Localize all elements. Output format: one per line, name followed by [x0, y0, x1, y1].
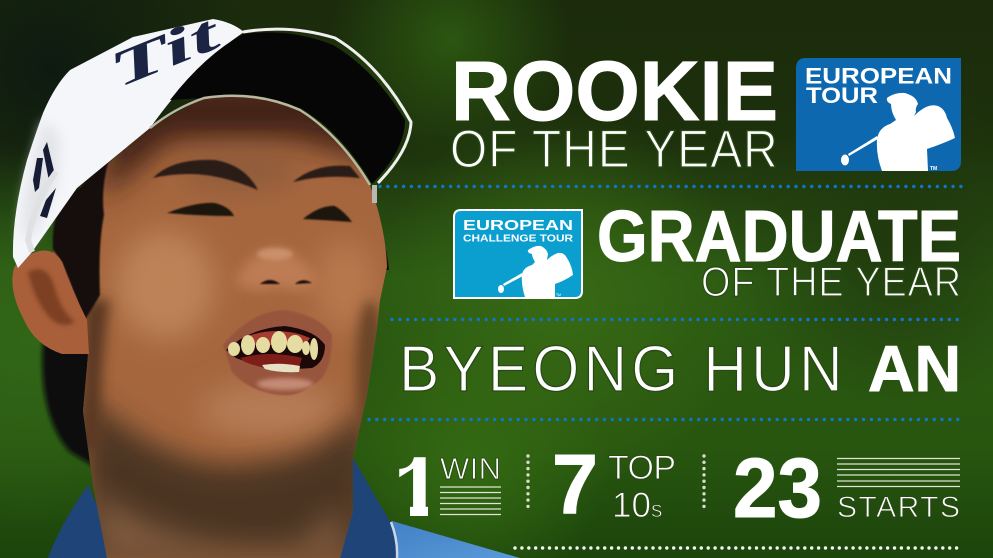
lower teeth: [262, 364, 300, 372]
logo: european challenge tour: [454, 210, 582, 298]
jaw and neck shadow: [85, 395, 370, 558]
stat: 7 top 10s: TOP: [608, 449, 676, 487]
forehead shade: [103, 97, 362, 206]
logo: european tour: TOUR: [806, 83, 878, 108]
cap crown: [13, 19, 244, 268]
dotted separator: [702, 456, 706, 512]
portrait: golfer with white cap: [12, 3, 520, 558]
player name: BYEONG HUN: [399, 333, 843, 405]
stat: 1 win: 1: [394, 440, 441, 534]
eyebrows: [153, 160, 258, 190]
heading: graduate of the year: [597, 197, 961, 305]
stat: 7 top 10s: 7: [552, 437, 598, 531]
icon: golfer silhouette: [498, 246, 573, 297]
shirt body: [380, 521, 520, 558]
upper teeth: [228, 331, 318, 360]
inner sweatband: [150, 96, 370, 185]
heading: graduate of the year: GRADUATE: [597, 197, 961, 277]
shirt collar: [48, 458, 398, 558]
heading: rookie of the year: OF THE YEAR: [450, 119, 778, 179]
dotted separator: [526, 456, 530, 512]
logo: european tour: EUROPEAN: [805, 64, 952, 88]
stat: 1 win: WIN: [440, 451, 501, 486]
icon: golfer silhouette: [841, 93, 955, 171]
hair at the back of the head: [42, 340, 100, 470]
cap logo script: Tit: [101, 3, 230, 98]
cheek highlights: [115, 230, 215, 340]
logo: european challenge tour: TM: [556, 293, 561, 297]
heading: rookie of the year: ROOKIE: [451, 44, 778, 138]
logo: european tour: TM: [930, 166, 937, 172]
stat: 23 starts: [733, 441, 960, 535]
stat: 7 top 10s: [552, 437, 676, 531]
cap strap: [28, 172, 56, 252]
brim top outline: [243, 29, 411, 183]
blue dotted divider 2: [392, 318, 961, 321]
left eye: [167, 203, 234, 216]
heading: graduate of the year: OF THE YEAR: [701, 259, 961, 305]
lips: [223, 310, 332, 395]
blue dotted divider 1: [380, 185, 961, 188]
cap mesh shading: [22, 120, 60, 235]
buckle: [372, 185, 377, 203]
stat: 7 top 10s: 10s: [612, 486, 662, 525]
nose: [236, 248, 318, 290]
stat: 1 win: [399, 457, 501, 516]
mouth: [223, 310, 332, 395]
ear: [12, 250, 89, 354]
right hair: [355, 180, 389, 270]
heading: rookie of the year: [450, 44, 778, 179]
cap underside brim: [170, 32, 405, 184]
logo: european challenge tour: CHALLENGE TOUR: [463, 232, 573, 244]
stat: 23 starts: 23: [733, 441, 822, 535]
logo: european tour: [796, 58, 961, 172]
blue dotted divider 3: [369, 418, 961, 421]
collar stripe: [391, 522, 397, 558]
hairline left: [53, 150, 112, 320]
right eye: [303, 206, 352, 222]
logo: european challenge tour: EUROPEAN: [463, 217, 573, 234]
player name: AN: [868, 332, 961, 405]
face and neck: [53, 97, 387, 558]
white dotted divider: [515, 546, 961, 550]
stat: 23 starts: STARTS: [837, 491, 960, 524]
mouth interior: [226, 326, 325, 369]
cap side logo: [33, 142, 56, 218]
